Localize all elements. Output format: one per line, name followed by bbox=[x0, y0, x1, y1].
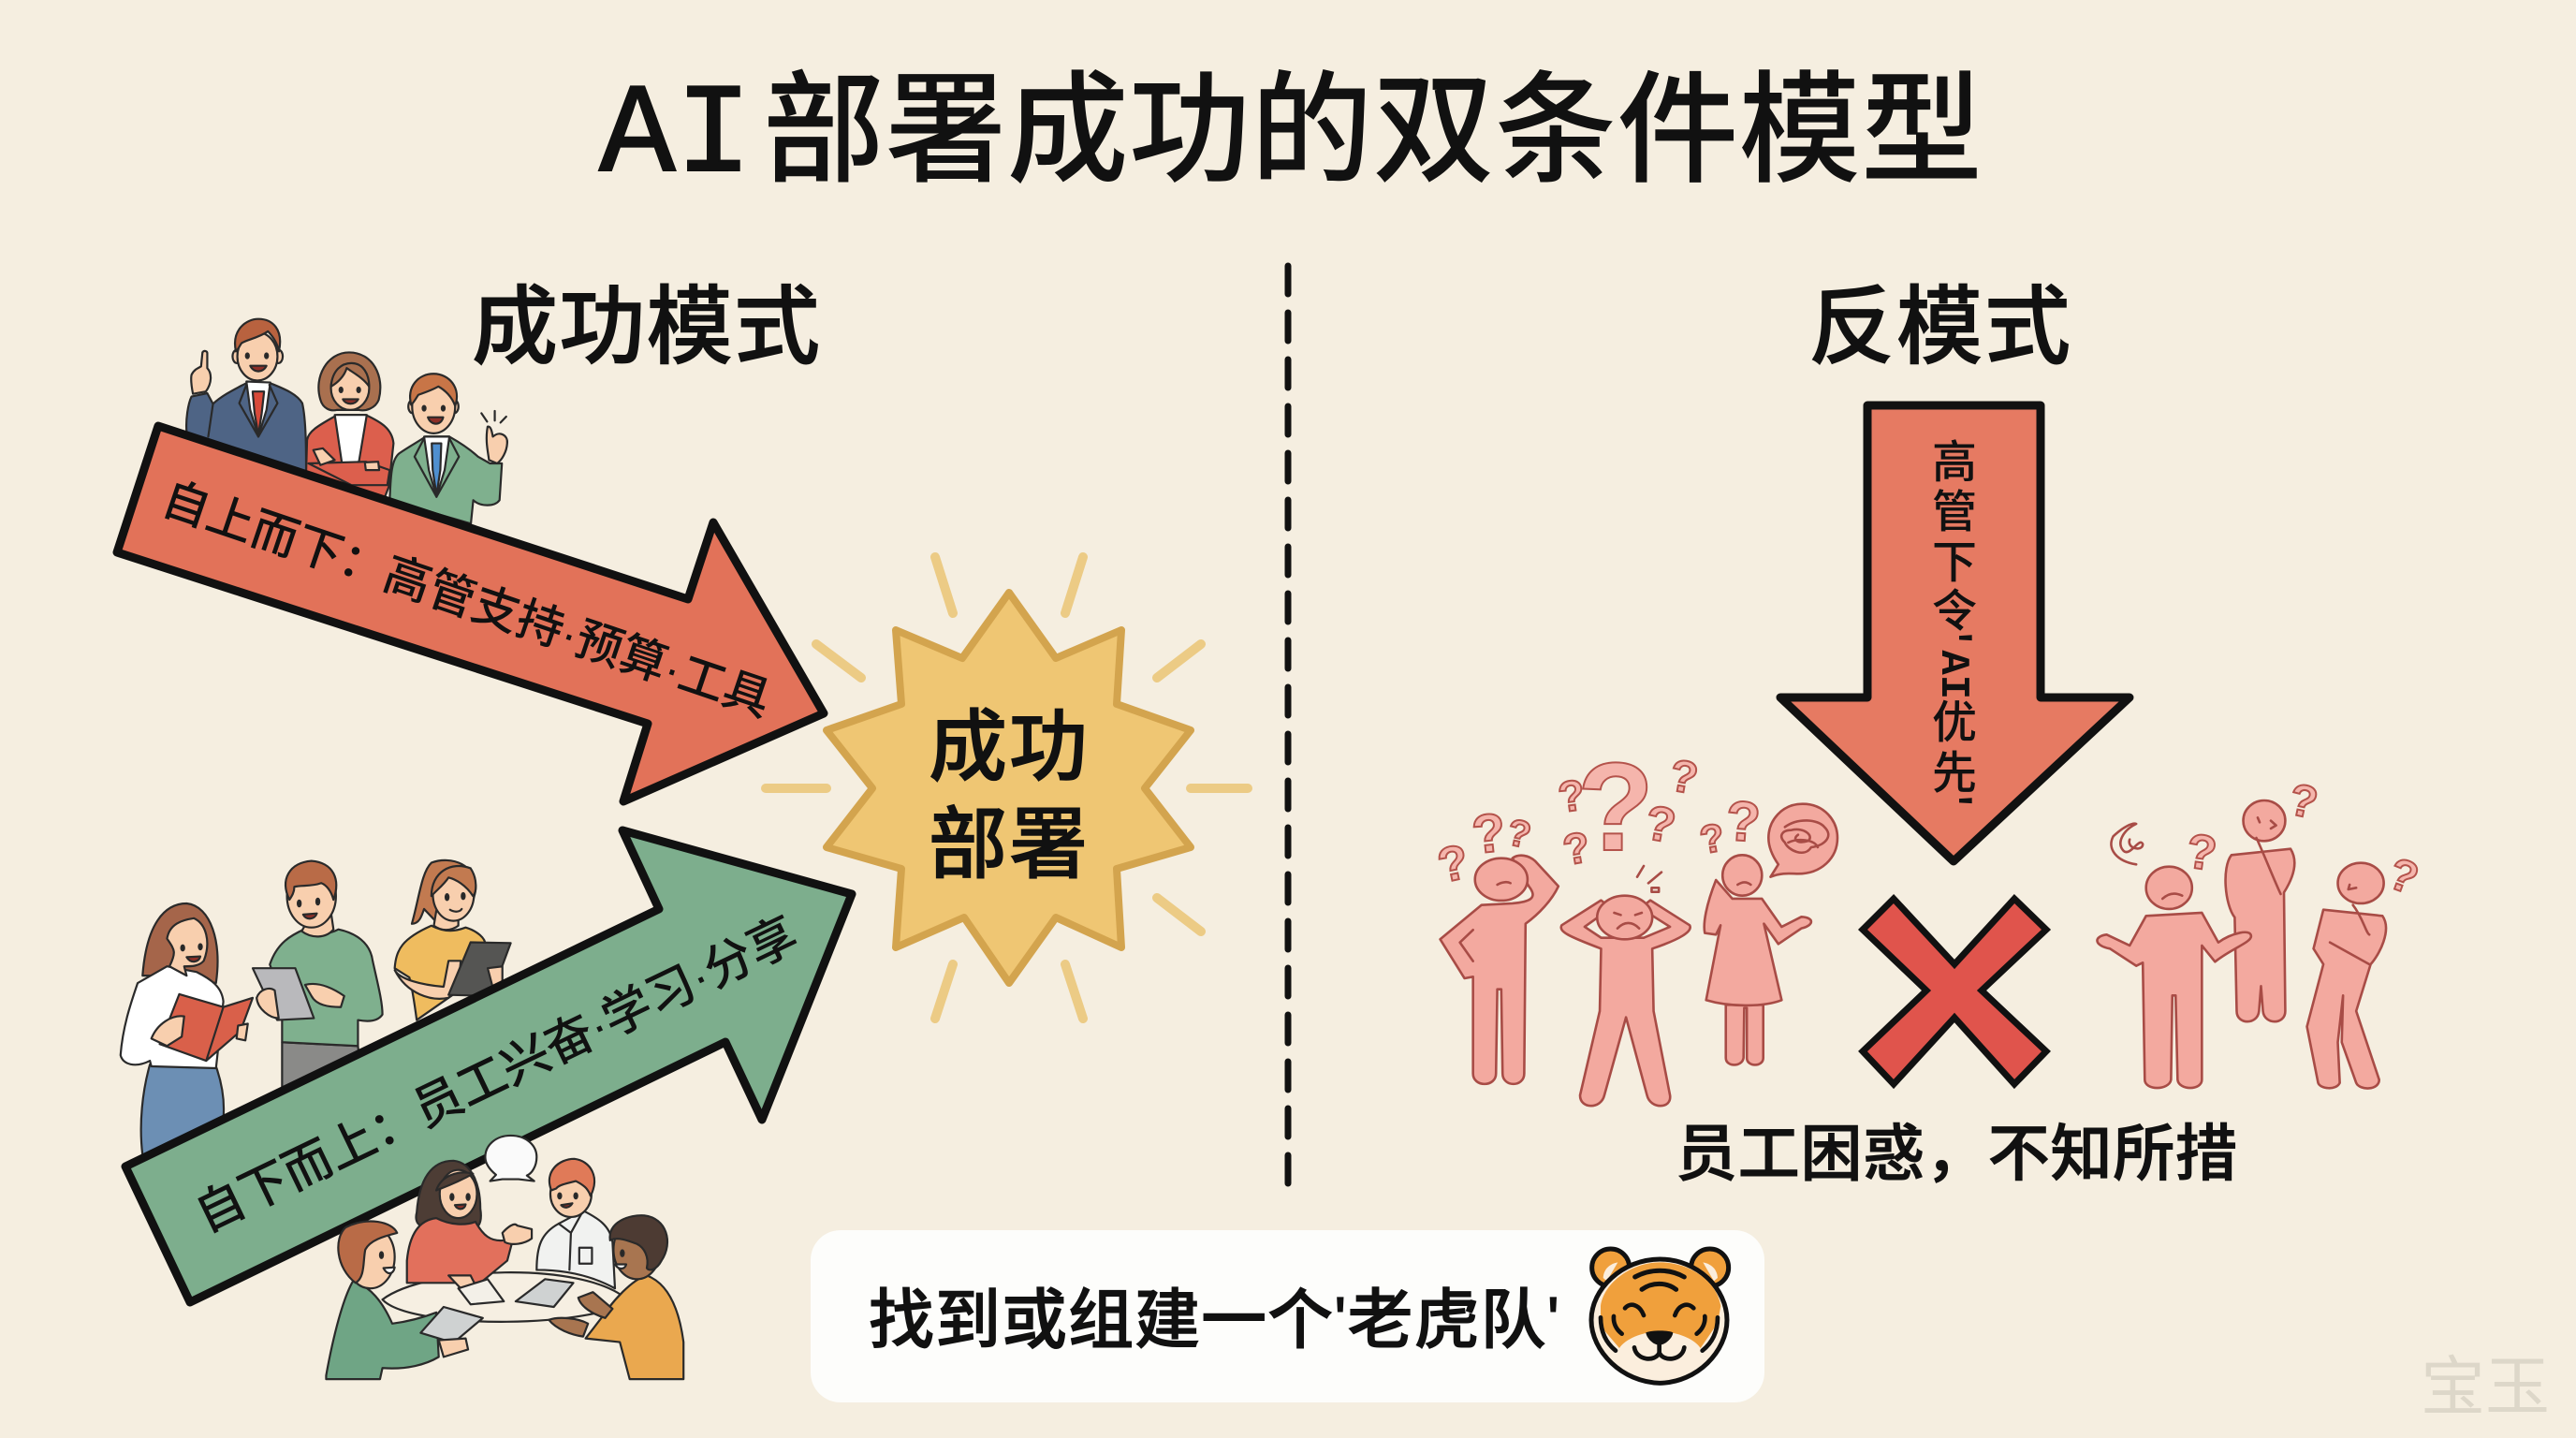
speech bubble with scribble bbox=[1768, 804, 1837, 877]
arrow: bottom-up bbox=[125, 830, 852, 1302]
question marks: ? bbox=[1666, 751, 1702, 804]
caption: confused employees: 员工困惑，不知所措 bbox=[1676, 1119, 2237, 1188]
success burst: 成功 bbox=[929, 703, 1088, 791]
question marks: ? bbox=[1503, 812, 1534, 857]
icon: tiger face bbox=[1591, 1249, 1729, 1383]
arrow: top-down bbox=[117, 426, 824, 801]
man in green suit bbox=[389, 374, 507, 523]
speech bubble bbox=[485, 1136, 536, 1181]
figure: hands on head bbox=[1561, 866, 1690, 1106]
arrow label: bottom-up: 自下而上：员工兴奋·学习·分享 bbox=[187, 907, 806, 1243]
question marks: ? bbox=[2382, 848, 2424, 904]
success burst: 部署 bbox=[929, 800, 1088, 888]
man in orange shirt bbox=[549, 1215, 683, 1379]
woman in red jacket bbox=[306, 352, 393, 497]
question marks: ? bbox=[1577, 738, 1654, 877]
figure: shrugging bbox=[2097, 824, 2251, 1088]
woman with tablet in yellow shirt bbox=[395, 860, 511, 1020]
illustration: learning employees bbox=[121, 860, 511, 1155]
question marks: ? bbox=[1433, 834, 1473, 894]
figure: woman in dress bbox=[1705, 855, 1811, 1064]
illustration: executives bbox=[186, 319, 507, 523]
figure: tall behind bbox=[2226, 800, 2294, 1021]
question marks: ? bbox=[2183, 824, 2220, 882]
woman in coral sweater bbox=[407, 1161, 532, 1304]
question marks: ? bbox=[1470, 801, 1509, 866]
question marks: ? bbox=[1641, 796, 1680, 854]
man in green jacket bbox=[326, 1222, 483, 1379]
panel: anti-pattern bbox=[1433, 280, 2424, 1188]
confused figures bbox=[1441, 800, 2386, 1106]
man in navy suit bbox=[186, 319, 306, 474]
rays around the burst bbox=[766, 557, 1248, 1019]
question marks: ? bbox=[1696, 814, 1728, 862]
man in white shirt bbox=[536, 1159, 615, 1288]
arrow label: top-down: 自上而下：高管支持·预算·工具 bbox=[155, 472, 777, 726]
heading: anti-pattern: 反模式 bbox=[1808, 280, 2071, 375]
callout: tiger team bbox=[811, 1230, 1764, 1402]
woman reading a book bbox=[121, 903, 253, 1155]
red cross bbox=[1863, 899, 2046, 1084]
panel: success pattern bbox=[117, 280, 1248, 1379]
arrow label: AI first: 优先 bbox=[1932, 698, 1977, 799]
question marks: ? bbox=[1724, 789, 1763, 854]
title: 部署成功的双条件模型 bbox=[763, 62, 1983, 198]
arrow label: executive order: 高管下令 bbox=[1932, 438, 1977, 637]
arrow label: AI first: 'AI bbox=[1929, 625, 1976, 699]
divider bbox=[1284, 266, 1292, 1183]
round table bbox=[383, 1272, 627, 1322]
question marks: ? bbox=[1555, 770, 1588, 822]
arrow label: AI first: ' bbox=[1929, 788, 1976, 813]
arrow: top-down order bbox=[1780, 405, 2130, 861]
figure: scratching head bbox=[1441, 856, 1559, 1084]
illustration: team discussion bbox=[326, 1136, 683, 1379]
heading: success pattern: 成功模式 bbox=[472, 280, 820, 375]
success burst bbox=[827, 593, 1191, 983]
title: AI bbox=[599, 65, 752, 209]
figure: arms crossed bbox=[2307, 863, 2386, 1089]
question marks: ? bbox=[2285, 774, 2322, 829]
tablet on table bbox=[516, 1279, 574, 1307]
callout text: 找到或组建一个'老虎队' bbox=[869, 1284, 1559, 1357]
question marks bbox=[1433, 738, 2424, 904]
man with tablet in green sweater bbox=[253, 861, 383, 1088]
arrow label: AI first bbox=[1929, 625, 1977, 813]
question marks: ? bbox=[1559, 822, 1594, 874]
watermark: 宝玉 bbox=[2421, 1351, 2550, 1423]
